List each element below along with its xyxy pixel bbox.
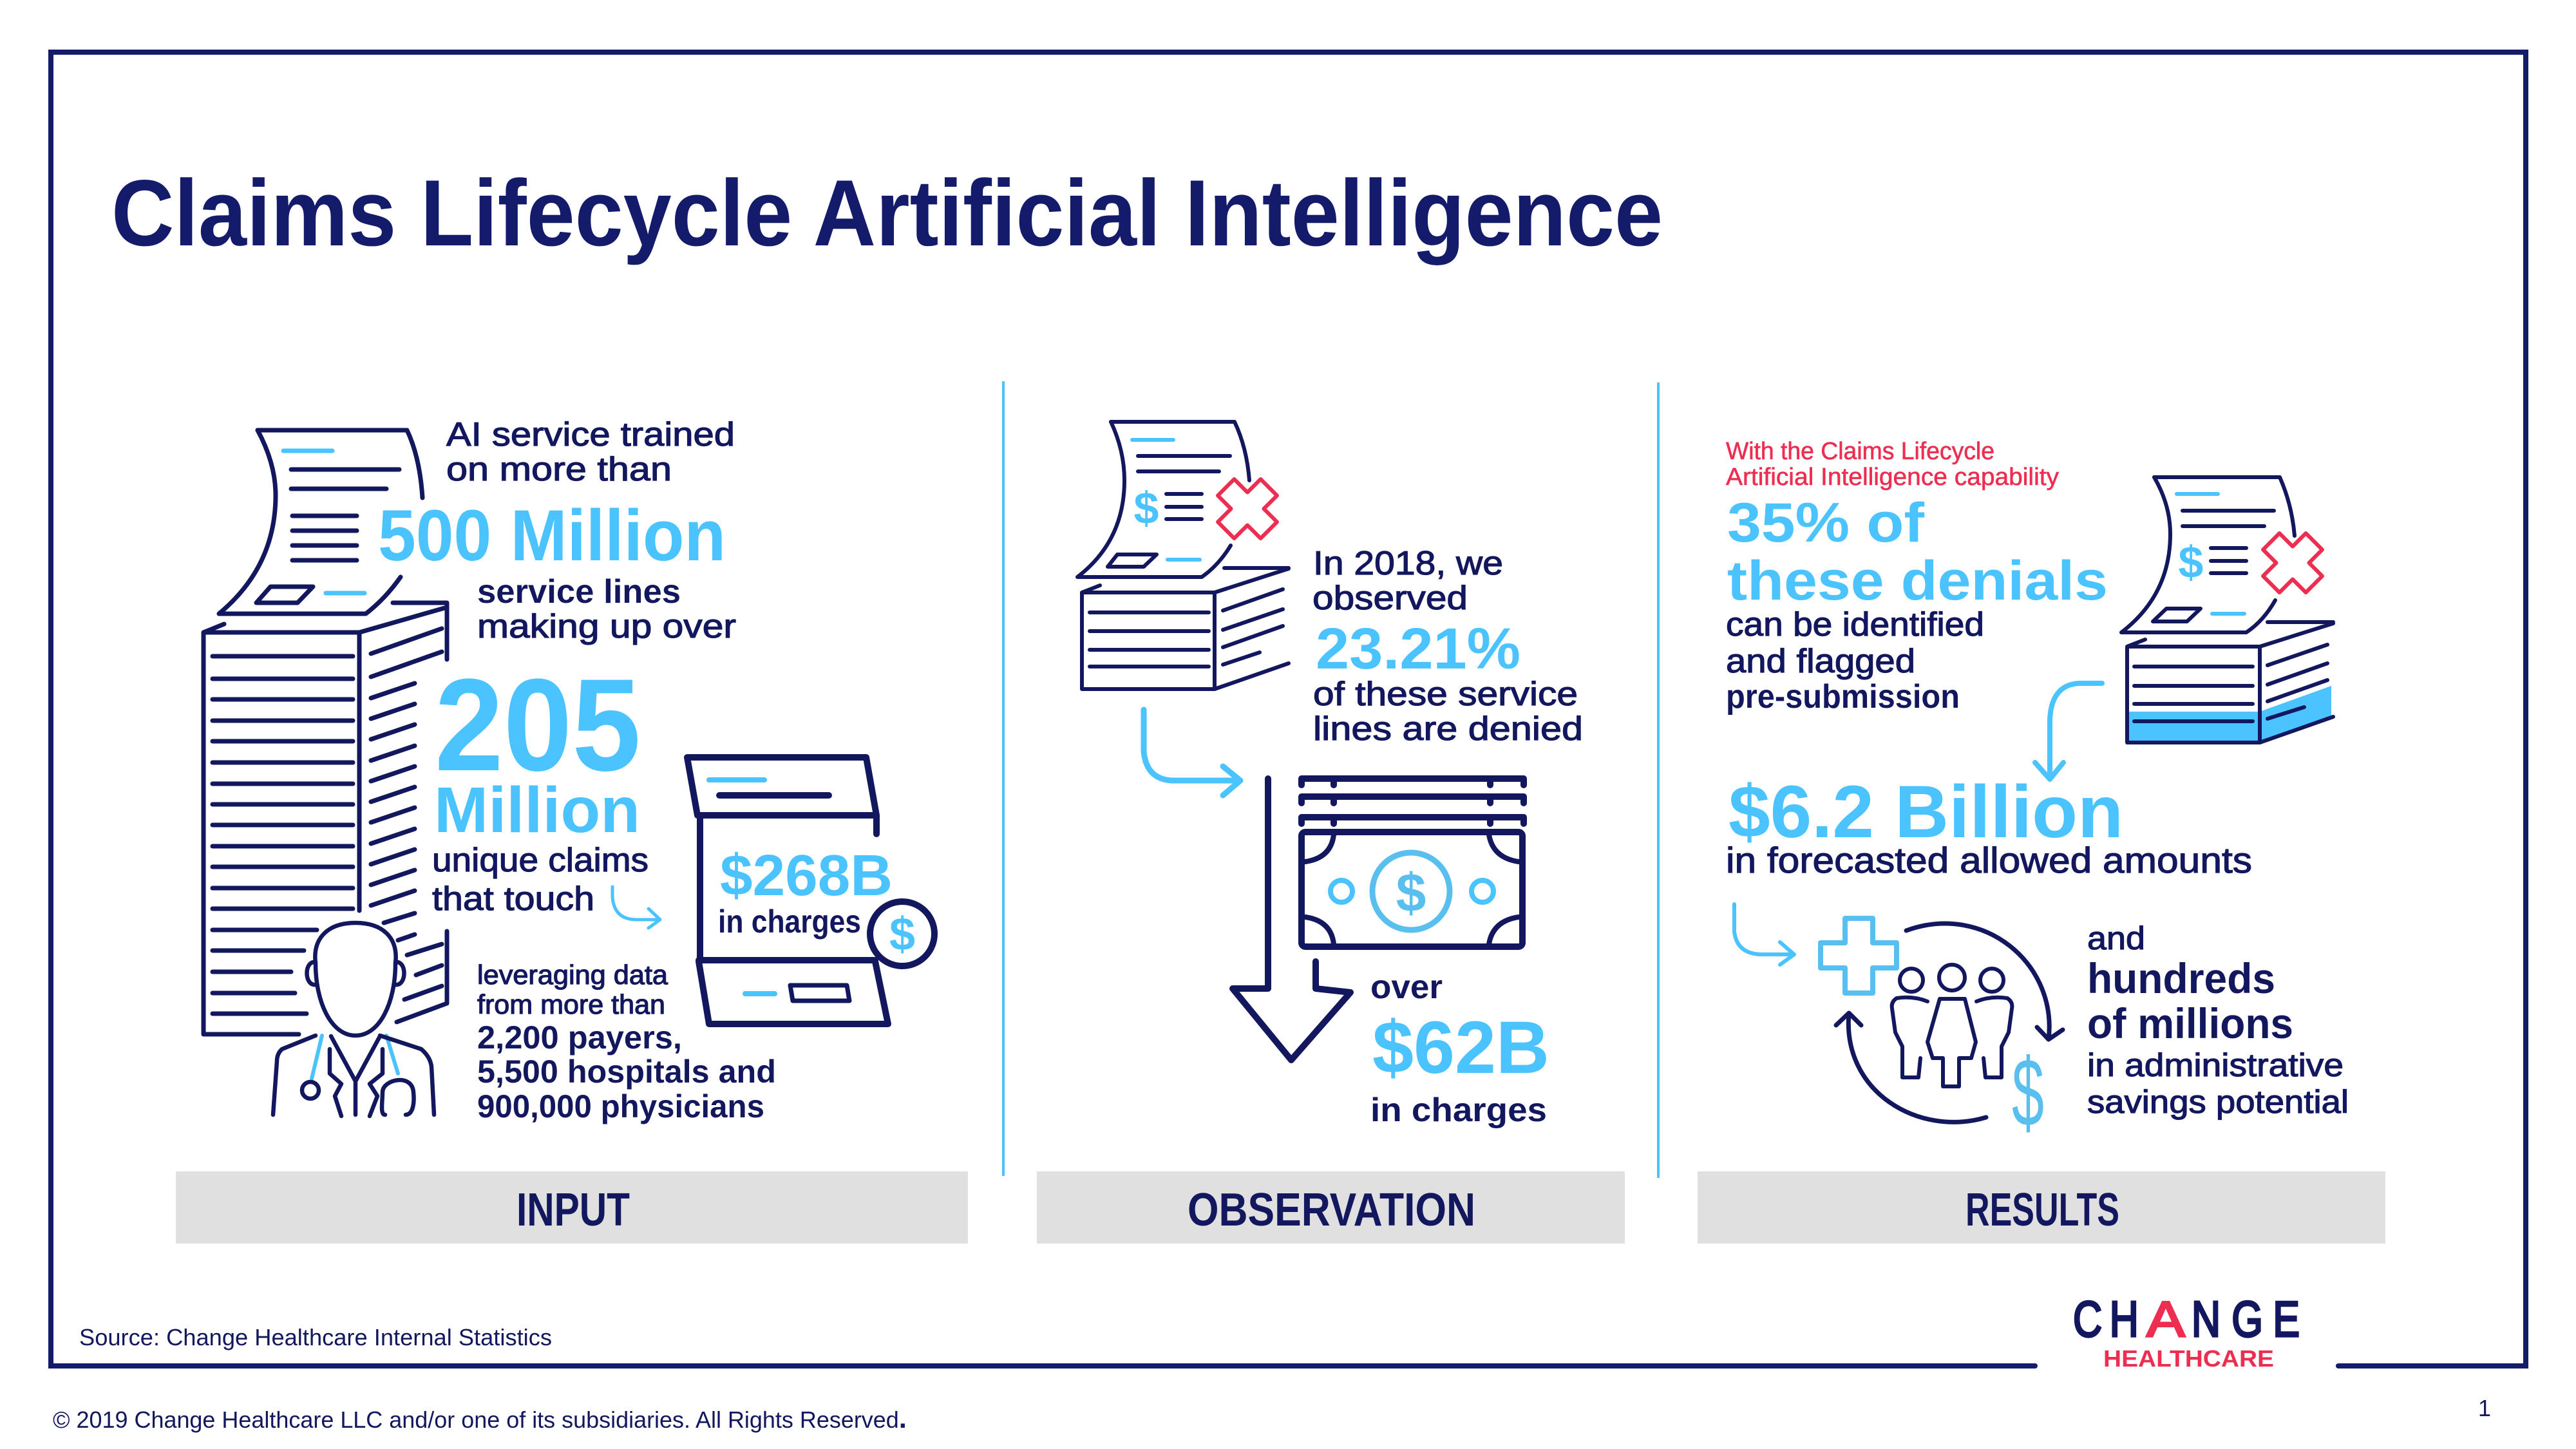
icon: savings cycle with people: $ [2012, 1038, 2044, 1146]
text: of these service lines: of these service [1313, 676, 1578, 713]
text: can be identified: and flagged [1726, 643, 1915, 680]
text: hundreds of millions: hundreds [2087, 954, 2275, 1002]
label bar: observation: OBSERVATION [1188, 1184, 1475, 1236]
logo: Change Healthcare: A [2146, 1291, 2185, 1347]
icon: coin [870, 902, 934, 966]
arrow: to savings icon [1734, 904, 1794, 965]
text: unique claims [432, 842, 649, 918]
stat: 35% of these denials [1727, 492, 2108, 612]
title: Claims Lifecycle Artificial Intelligence [111, 160, 1663, 265]
icon: money stack: $ [1396, 862, 1426, 923]
logo: Change Healthcare: CH [2073, 1291, 2139, 1347]
text: In 2018 [1312, 545, 1503, 617]
icon: money stack [1302, 779, 1524, 947]
text: leveraging data: 900,000 physicians [477, 1088, 764, 1124]
text: AI service trained [446, 416, 735, 488]
text: AI service trained: on more than [446, 451, 672, 488]
text: service lines: service lines [477, 573, 681, 611]
text: of these service lines [1313, 676, 1583, 748]
stat: 205 Million: 205 [435, 652, 641, 799]
text: of these service lines: lines are denied [1313, 710, 1583, 748]
stat: over $62B in charges [1370, 969, 1549, 1129]
icon: red x [2250, 520, 2335, 605]
stat: 205 Million: Million [434, 774, 640, 846]
text: hundreds of millions: savings potential [2087, 1084, 2349, 1120]
text: leveraging data: 5,500 hospitals and [477, 1054, 776, 1090]
panel: input [176, 416, 968, 1244]
label bar: observation [1037, 1171, 1625, 1244]
page number: 1 [2478, 1395, 2491, 1421]
text: leveraging data: 2,200 payers, [477, 1019, 682, 1056]
icon: savings cycle with people [1821, 918, 2063, 1146]
arrow: to 6.2 billion [2035, 683, 2102, 779]
text: capability note [1726, 438, 2059, 491]
arrow: large down [1233, 779, 1350, 1060]
stat: 500 Million: 500 Million [378, 495, 726, 576]
icon: charges document [687, 757, 934, 1024]
icon: doctor [273, 923, 434, 1116]
icon: coin: $ [889, 909, 915, 960]
panel: observation [1037, 422, 1625, 1244]
logo: Change Healthcare [2073, 1291, 2300, 1372]
stat: over $62B in charges: $62B [1372, 1007, 1549, 1089]
text: hundreds of millions: and [2087, 920, 2145, 956]
text: AI service trained: AI service trained [446, 416, 735, 453]
text: leveraging data [477, 960, 776, 1124]
stat: over $62B in charges: over [1370, 969, 1443, 1006]
stat: $268B in charges [718, 844, 893, 940]
text: In 2018: observed [1312, 580, 1468, 617]
text: hundreds of millions: in administrative [2087, 1047, 2344, 1083]
stat: 35% of these denials: these denials [1727, 550, 2108, 612]
text: leveraging data: leveraging data [477, 960, 668, 990]
label bar: input: INPUT [516, 1184, 630, 1236]
stat: over $62B in charges: in charges [1370, 1092, 1547, 1129]
icon: denied claim on stack: $ [1134, 483, 1159, 533]
stat: $6.2 Billion: $6.2 Billion [1728, 771, 2123, 853]
text: service lines [477, 573, 736, 645]
stat: $268B in charges: $268B [720, 844, 893, 908]
icon: flagged claim on stack: $ [2179, 537, 2203, 587]
stat: $268B in charges: in charges [718, 904, 861, 940]
logo: Change Healthcare: NGE [2192, 1291, 2300, 1347]
text: In 2018: In 2018, we [1313, 545, 1503, 582]
text: service lines: making up over [477, 608, 736, 645]
text: can be identified: pre-submission [1726, 678, 1960, 715]
icon: claim paper on tall stack [204, 430, 447, 1034]
icon: red x [1205, 466, 1290, 551]
stat: 23.21%: 23.21% [1316, 617, 1520, 681]
text: hundreds of millions [2087, 920, 2349, 1120]
label bar: input [176, 1171, 968, 1244]
text: can be identified [1726, 606, 1984, 715]
text: unique claims: that touch [432, 880, 594, 918]
text: leveraging data: from more than [477, 989, 665, 1019]
panel: results [1698, 438, 2385, 1244]
text: capability note: Artificial Intelligence capability [1726, 464, 2059, 491]
text: hundreds of millions: of millions [2087, 999, 2293, 1047]
logo: Change Healthcare: HEALTHCARE [2103, 1345, 2274, 1372]
stat: 35% of these denials: 35% of [1727, 492, 1924, 554]
icon: denied claim on stack [1077, 422, 1290, 689]
copyright footer: © 2019 Change Healthcare LLC and/or one of its subsidiaries. All Rights Reserved. [53, 1403, 907, 1434]
text: unique claims: unique claims [432, 842, 649, 879]
label bar: results: RESULTS [1965, 1184, 2119, 1236]
label bar: results [1698, 1171, 2385, 1244]
arrow: to charges [612, 887, 660, 928]
text: capability note: With the Claims Lifecycle [1726, 438, 1994, 465]
icon: flagged claim on stack [2121, 477, 2335, 743]
arrow: to money [1144, 710, 1240, 795]
source note: Source: Change Healthcare Internal Statistics [79, 1324, 552, 1350]
text: can be identified: can be identified [1726, 606, 1984, 643]
text: in forecasted allowed amounts: in forecasted allowed amounts [1726, 840, 2252, 880]
